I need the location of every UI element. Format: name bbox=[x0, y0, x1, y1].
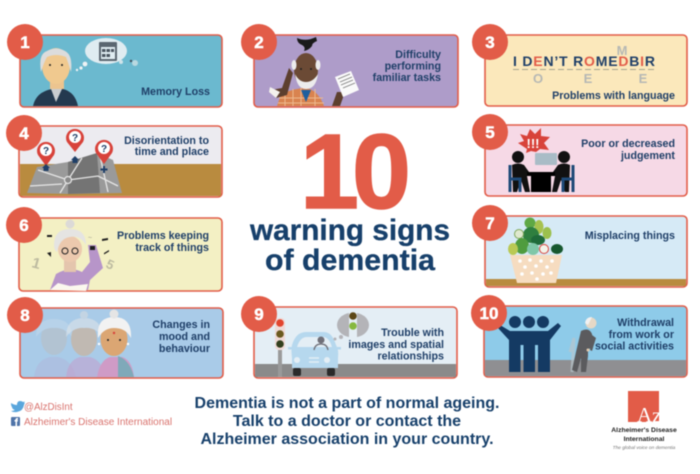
panel 10: withdrawal: social activities bbox=[595, 340, 674, 352]
icon: elderly man bbox=[33, 48, 78, 106]
icon: three women fading bbox=[34, 310, 134, 377]
number badge 3 bbox=[472, 24, 508, 60]
panel 2: familiar tasks: performing bbox=[385, 60, 441, 72]
number badge 1: 1 bbox=[20, 33, 30, 52]
logo: Alzheimer's Disease International: The global voice on dementia bbox=[613, 445, 676, 451]
number badge 7: 7 bbox=[485, 214, 495, 233]
icon: map with pins: ? bbox=[72, 133, 78, 144]
scrambled words: I DEN’T ROMEDBIR bbox=[513, 53, 655, 69]
label: Problems keeping bbox=[117, 230, 209, 242]
panel 6: keeping track: track of things bbox=[135, 242, 209, 254]
icon: two people at a table bbox=[510, 151, 573, 192]
number badge 8: 8 bbox=[20, 306, 30, 325]
icon: map with pins bbox=[27, 129, 122, 194]
panel 4: disorientation bbox=[6, 115, 222, 197]
icon: floating numbers: 5 bbox=[104, 256, 117, 273]
label: Poor or decreased bbox=[581, 138, 675, 150]
icon: car with driver bbox=[288, 332, 341, 376]
social links: Alzheimer's Disease International bbox=[24, 417, 172, 428]
icon: woman with glasses and book bbox=[50, 220, 103, 291]
label: Difficulty bbox=[395, 49, 441, 61]
ground bbox=[486, 279, 686, 286]
ground bbox=[485, 360, 686, 376]
closing message bbox=[195, 395, 499, 448]
panel 5: judgement bbox=[472, 114, 687, 196]
scrambled words: E bbox=[639, 71, 648, 86]
logo: Alzheimer's Disease International: Alzheimer's Disease bbox=[611, 427, 677, 434]
scrambled words: O bbox=[533, 71, 543, 86]
number badge 4: 4 bbox=[19, 124, 29, 143]
number badge 4 bbox=[6, 115, 42, 151]
closing message: Dementia is not a part of normal ageing. bbox=[195, 395, 499, 412]
number badge 8 bbox=[7, 297, 43, 333]
title: of dementia bbox=[265, 244, 436, 277]
label: Memory Loss bbox=[141, 86, 210, 98]
number badge 6 bbox=[6, 207, 42, 243]
number badge 9: 9 bbox=[254, 305, 264, 324]
number badge 6: 6 bbox=[19, 216, 29, 235]
label: Problems with language bbox=[552, 90, 675, 102]
panel 9: spatial bbox=[241, 296, 457, 378]
road bbox=[255, 364, 456, 377]
number badge 10: 10 bbox=[480, 304, 498, 323]
closing message: Talk to a doctor or contact the bbox=[233, 413, 461, 430]
panel 1: memory loss bbox=[7, 24, 222, 107]
label: Changes in bbox=[152, 319, 210, 331]
panel 9: spatial: images and spatial bbox=[348, 339, 444, 351]
ground bbox=[20, 164, 221, 196]
icon: traffic light bbox=[275, 318, 285, 377]
scrambled words: E bbox=[584, 71, 593, 86]
title: 10 bbox=[300, 113, 407, 231]
number badge 9 bbox=[241, 296, 277, 332]
number badge 3: 3 bbox=[485, 33, 495, 52]
panel 2: familiar tasks: familiar tasks bbox=[373, 72, 441, 84]
label: Trouble with bbox=[381, 327, 444, 339]
panel 8: mood: mood and bbox=[159, 331, 210, 343]
icon: floating numbers: 1 bbox=[30, 254, 42, 273]
icon: confused man with paper bbox=[269, 53, 359, 106]
panel 6: keeping track bbox=[6, 207, 222, 291]
panel 9: spatial: relationships bbox=[377, 350, 444, 362]
panel 10: withdrawal bbox=[471, 295, 687, 377]
logo: Alzheimer's Disease International: Az bbox=[637, 403, 662, 427]
icon: burst with exclamation marks: !!! bbox=[526, 136, 540, 151]
icon: group of three people bbox=[498, 316, 561, 372]
panel 4: disorientation: time and place bbox=[135, 146, 209, 158]
label: Withdrawal bbox=[617, 317, 674, 329]
icon: stooped elderly man bbox=[570, 317, 596, 372]
icon: map with pins: ? bbox=[43, 146, 49, 157]
icon: map with pins: ? bbox=[101, 144, 107, 155]
panel 2: familiar tasks bbox=[241, 24, 458, 107]
number badge 2 bbox=[241, 24, 277, 60]
icon: scribble bbox=[297, 37, 317, 51]
icon: thought cloud with calendar bbox=[76, 38, 138, 71]
number badge 2: 2 bbox=[254, 33, 264, 52]
icon: facebook bbox=[11, 417, 20, 426]
panel 3: language bbox=[472, 24, 687, 106]
icon: floating numbers bbox=[30, 235, 117, 273]
scrambled words: M bbox=[617, 43, 627, 58]
scrambled words bbox=[513, 43, 655, 86]
number badge 10 bbox=[471, 295, 507, 331]
icon: thought cloud with traffic light bbox=[334, 311, 369, 340]
icon: twitter bird bbox=[11, 401, 25, 412]
panel 5: judgement: judgement bbox=[620, 150, 675, 162]
label: Disorientation to bbox=[124, 135, 209, 147]
closing message: Alzheimer association in your country. bbox=[200, 431, 494, 448]
panel 8: mood bbox=[7, 297, 223, 378]
title: warning signs bbox=[249, 214, 450, 247]
title bbox=[249, 113, 450, 277]
number badge 7 bbox=[472, 205, 508, 241]
icon: basket of fruit and vegetables bbox=[508, 218, 563, 283]
social links: @AlzDisInt bbox=[24, 402, 73, 413]
panel 7: misplacing bbox=[472, 205, 687, 287]
panel 10: withdrawal: from work or bbox=[609, 329, 674, 341]
icon: burst with exclamation marks bbox=[518, 128, 550, 153]
logo: Alzheimer's Disease International: International bbox=[624, 436, 664, 443]
label: Misplacing things bbox=[585, 230, 675, 242]
number badge 5 bbox=[472, 114, 508, 150]
social links bbox=[11, 401, 172, 428]
number badge 5: 5 bbox=[485, 123, 495, 142]
icon: floating numbers: ~ bbox=[88, 235, 92, 242]
logo: Alzheimer's Disease International bbox=[611, 391, 677, 451]
number badge 1 bbox=[7, 24, 43, 60]
panel 8: mood: behaviour bbox=[159, 343, 210, 355]
